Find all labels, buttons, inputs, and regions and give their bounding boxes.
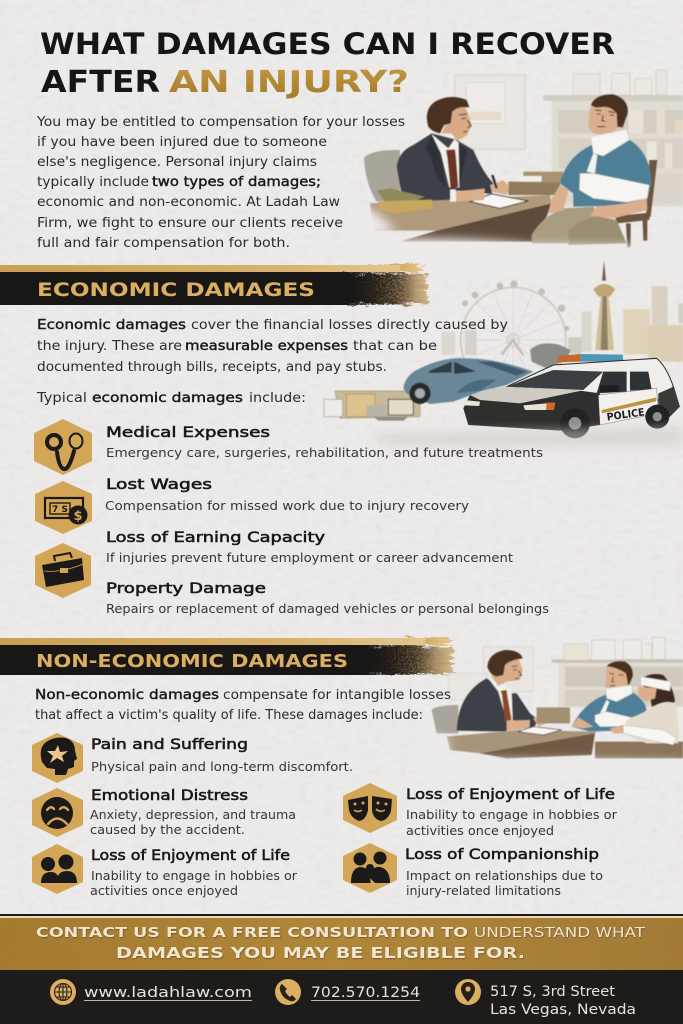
police car: POLICE xyxy=(606,406,645,424)
intro paragraph: You may be entitled to compensation for your losses xyxy=(36,115,405,130)
item: loss of companionship xyxy=(405,847,603,898)
title: AFTER xyxy=(41,65,160,100)
economic damages description: Typical xyxy=(36,391,87,406)
faded office background xyxy=(455,70,683,207)
section banner: economic damages xyxy=(0,265,427,305)
item: property damage: Property Damage xyxy=(106,581,266,597)
icon: cash: $ xyxy=(73,509,83,524)
non-economic damages description: compensate for intangible losses xyxy=(223,688,451,703)
item: property damage xyxy=(106,581,549,616)
icon: globe xyxy=(50,979,76,1005)
contact footer xyxy=(0,970,683,1024)
illustration: Las Vegas skyline and crashed cars xyxy=(324,260,683,448)
intro paragraph: if you have been injured due to someone xyxy=(37,135,327,150)
item: medical expenses: Emergency care, surgeries, rehabilitation, and future treatments xyxy=(106,446,543,460)
economic damages description: cover the financial losses directly caused by xyxy=(191,318,508,333)
economic damages description: Economic damages xyxy=(37,318,186,333)
call to action band: CONTACT US FOR A FREE CONSULTATION TO xyxy=(36,925,468,941)
client xyxy=(532,94,657,247)
item: pain and suffering xyxy=(91,737,353,774)
item: loss of earning capacity: If injuries prevent future employment or career advancement xyxy=(106,551,513,565)
intro paragraph: full and fair compensation for both. xyxy=(37,236,290,251)
icon: crying face xyxy=(32,788,83,837)
illustration: lawyer and injured client xyxy=(350,70,683,273)
item: emotional distress: Emotional Distress xyxy=(91,788,248,804)
item: loss of enjoyment of life, right column xyxy=(406,787,617,838)
address xyxy=(490,984,636,1018)
non-economic damages description: that affect a victim's quality of life. These damages include: xyxy=(35,708,423,723)
call to action band: DAMAGES YOU MAY BE ELIGIBLE FOR. xyxy=(116,944,525,962)
mist xyxy=(420,737,683,775)
item: loss of companionship: Impact on relationships due to xyxy=(406,869,603,883)
economic damages description: that can be xyxy=(353,339,437,354)
intro paragraph: typically include xyxy=(37,175,149,190)
icon: briefcase xyxy=(35,543,91,598)
economic damages description xyxy=(36,318,508,406)
icon: phone xyxy=(275,979,301,1005)
item: loss of enjoyment of life: Inability to engage in hobbies or xyxy=(91,869,297,883)
title: WHAT DAMAGES CAN I RECOVER xyxy=(40,27,615,61)
item: loss of enjoyment of life, right column: Inability to engage in hobbies or xyxy=(406,808,617,822)
item: lost wages xyxy=(105,477,469,513)
intro paragraph: else's negligence. Personal injury claims xyxy=(37,155,317,170)
intro paragraph: economic and non-economic. At Ladah Law xyxy=(37,195,340,210)
item: lost wages: Lost Wages xyxy=(106,477,212,493)
section banner: non-economic damages xyxy=(0,638,452,675)
icon: sad and happy figures xyxy=(32,844,83,894)
item: medical expenses xyxy=(106,425,543,460)
section banner: non-economic damages: NON-ECONOMIC DAMAGES xyxy=(36,652,348,672)
item: loss of companionship: injury-related limitations xyxy=(406,884,561,898)
icon: theatre masks xyxy=(343,783,397,833)
illustration: lawyer with two injured clients xyxy=(420,637,683,775)
intro paragraph: Firm, we fight to ensure our clients receive xyxy=(37,216,343,231)
item: loss of earning capacity: Loss of Earning Capacity xyxy=(106,530,326,546)
male client xyxy=(572,661,647,732)
item: pain and suffering: Pain and Suffering xyxy=(91,737,248,753)
police car xyxy=(463,354,680,438)
economic damages description: include: xyxy=(249,391,306,406)
icon: companions xyxy=(343,843,397,893)
icon: stethoscope xyxy=(34,419,92,475)
website: www.ladahlaw.com xyxy=(84,985,252,1001)
item: pain and suffering: Physical pain and long-term discomfort. xyxy=(91,760,353,774)
call to action band xyxy=(0,914,683,970)
item: loss of enjoyment of life: Loss of Enjoyment of Life xyxy=(91,848,290,864)
icon: location pin xyxy=(455,979,481,1005)
item: loss of companionship: Loss of Companionship xyxy=(405,847,599,863)
lawyer xyxy=(364,97,493,204)
intro paragraph: two types of damages; xyxy=(152,175,321,190)
section banner: economic damages: ECONOMIC DAMAGES xyxy=(37,280,315,301)
desk and paperwork xyxy=(370,172,563,242)
desk xyxy=(447,707,683,758)
non-economic damages description: Non-economic damages xyxy=(35,688,219,703)
intro paragraph xyxy=(36,115,405,251)
mist xyxy=(350,208,683,273)
economic damages description: the injury. These are xyxy=(37,339,182,354)
document boxes xyxy=(324,391,420,421)
economic damages description: documented through bills, receipts, and pay stubs. xyxy=(37,360,387,375)
call to action band: UNDERSTAND WHAT xyxy=(474,925,646,941)
item: loss of earning capacity xyxy=(106,530,513,565)
item: emotional distress: caused by the accident. xyxy=(90,823,245,837)
address: 517 S, 3rd Street xyxy=(490,984,615,1000)
icon: pain head xyxy=(32,733,83,783)
item: loss of enjoyment of life: activities once enjoyed xyxy=(90,884,238,898)
economic damages description: economic damages xyxy=(92,391,243,406)
item: emotional distress: Anxiety, depression, and trauma xyxy=(90,808,296,822)
icon: cash: 7 S xyxy=(52,505,68,515)
item: loss of enjoyment of life, right column: activities once enjoyed xyxy=(406,824,554,838)
address: Las Vegas, Nevada xyxy=(490,1002,636,1018)
title: AN INJURY? xyxy=(169,65,409,100)
item: loss of enjoyment of life xyxy=(90,848,297,898)
item: medical expenses: Medical Expenses xyxy=(106,425,270,441)
item: loss of enjoyment of life, right column: Loss of Enjoyment of Life xyxy=(406,787,615,803)
road mist xyxy=(370,427,683,448)
non-economic damages description xyxy=(35,688,451,723)
economic damages description: measurable expenses xyxy=(185,339,348,354)
faded office background xyxy=(448,637,683,707)
item: property damage: Repairs or replacement of damaged vehicles or personal belongings xyxy=(106,602,549,616)
icon: cash xyxy=(35,481,92,534)
female client xyxy=(610,674,679,745)
item: lost wages: Compensation for missed work due to injury recovery xyxy=(105,499,469,513)
item: emotional distress xyxy=(90,788,296,837)
title xyxy=(40,27,615,100)
phone number: 702.570.1254 xyxy=(311,985,420,1001)
crashed blue car xyxy=(403,358,533,404)
skyline xyxy=(442,260,683,393)
lawyer xyxy=(432,650,549,733)
